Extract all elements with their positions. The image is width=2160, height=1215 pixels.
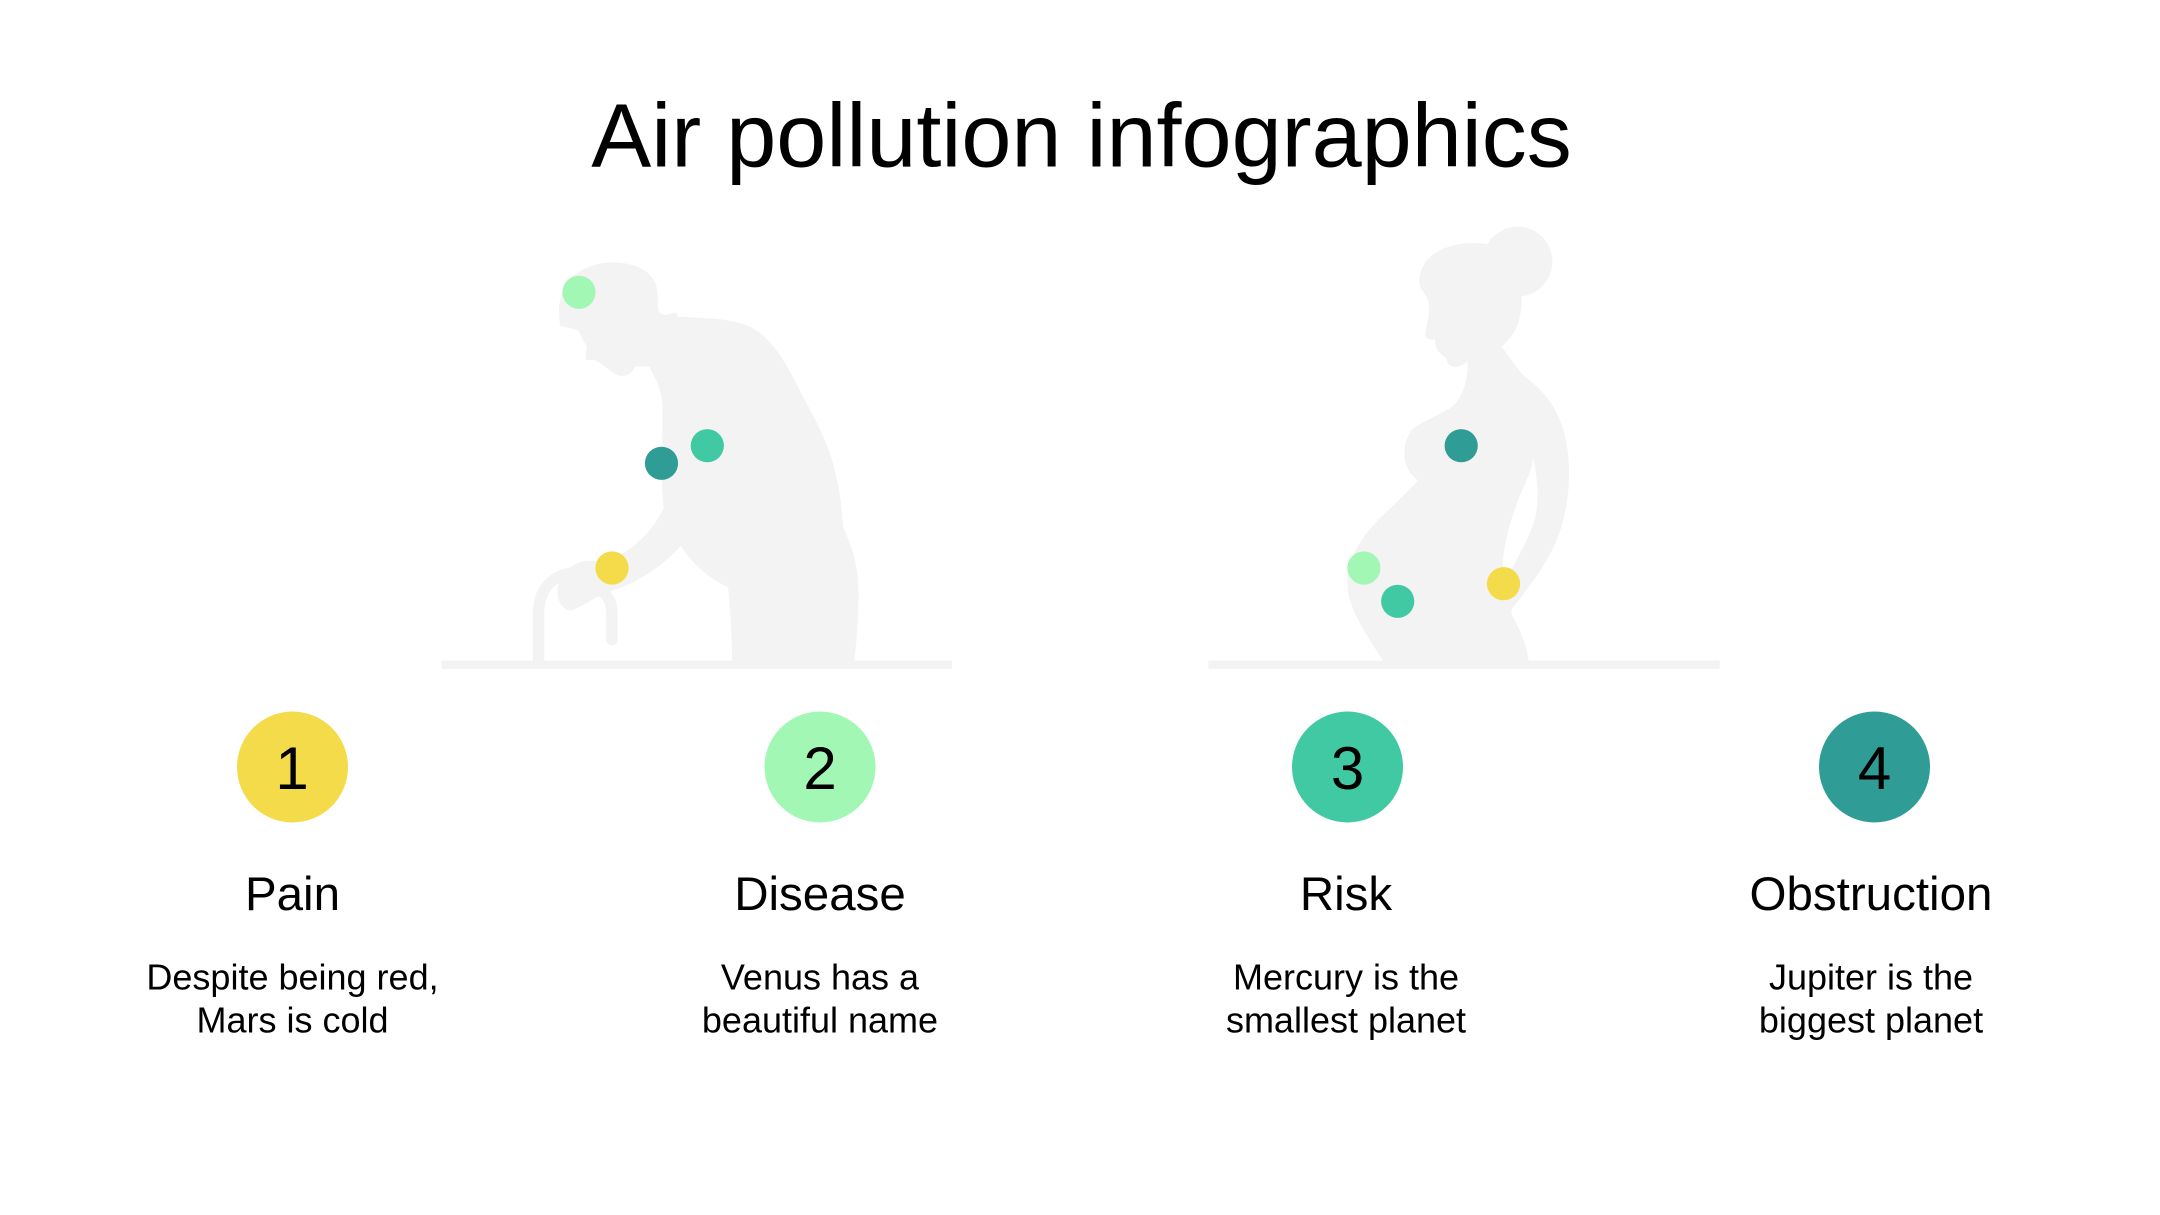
man silhouette [442,262,952,669]
description: pain: Despite being red, [146,956,439,998]
heading: disease: Disease [734,868,906,921]
description: obstruction: biggest planet [1759,1000,1983,1040]
man marker: obstruction (chest) [645,447,678,480]
illustration: pregnant woman [1208,227,1720,669]
description: risk: smallest planet [1226,1000,1466,1040]
number badge 2: 2 [803,735,837,802]
illustration: elderly man with walker [442,262,952,669]
woman marker: pain (back) [1487,567,1520,600]
description: disease: beautiful name [702,1000,938,1040]
description: obstruction: Jupiter is the [1769,956,1973,998]
woman marker: disease (belly) [1347,551,1380,585]
man marker: risk (chest) [691,429,724,462]
number badge 3: 3 [1331,735,1364,802]
man marker: disease (head) [562,276,596,309]
description: pain: Mars is cold [196,1000,389,1040]
man marker: pain (wrist) [595,551,629,585]
column 3: risk [1226,712,1466,1040]
number badge 1 [237,712,348,822]
number badge 4 [1819,712,1930,822]
heading: obstruction: Obstruction [1750,868,1992,921]
column 4: obstruction [1750,712,1992,1040]
number badge 2 [764,712,876,822]
heading: pain: Pain [245,868,340,921]
number badge 1: 1 [275,735,309,802]
column 1: pain [146,712,439,1040]
heading: risk: Risk [1300,868,1392,921]
number badge 4: 4 [1858,735,1891,802]
description: disease: Venus has a [721,956,920,998]
title: Air pollution infographics [591,86,1572,186]
number badge 3 [1292,712,1403,822]
column 2: disease [702,712,938,1040]
woman marker: obstruction (chest) [1445,429,1478,462]
woman marker: risk (belly) [1381,585,1414,618]
description: risk: Mercury is the [1233,956,1459,998]
woman silhouette [1208,227,1720,669]
